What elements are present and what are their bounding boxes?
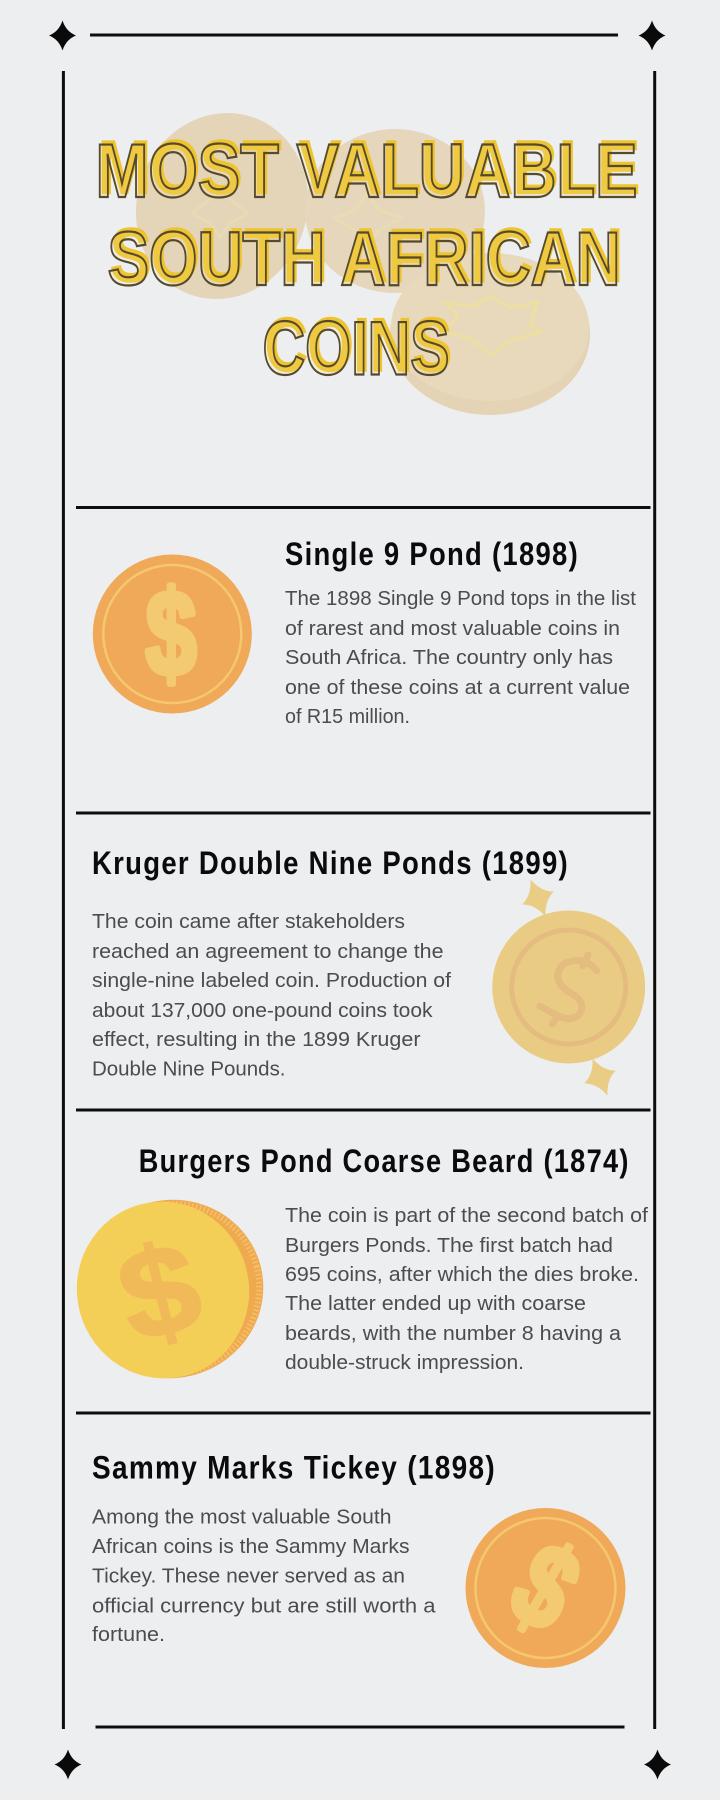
icon: yellow coin with ridged edge: $ <box>105 1215 214 1370</box>
divider 1 <box>76 506 650 509</box>
body text: reached an agreement to change the <box>92 941 444 963</box>
body text: single-nine labeled coin. Production of <box>92 970 451 992</box>
body text <box>92 1506 436 1646</box>
panel: Kruger Double Nine Ponds <box>92 845 645 1102</box>
body text: Tickey. These never served as an <box>92 1566 405 1588</box>
heading: Sammy Marks Tickey (1898) <box>92 1450 496 1486</box>
body text: double-struck impression. <box>285 1352 524 1374</box>
body text: African coins is the Sammy Marks <box>92 1536 409 1558</box>
body text: The coin is part of the second batch of <box>285 1205 648 1227</box>
panel: Single 9 Pond <box>93 536 636 728</box>
body text: of R15 million. <box>285 706 410 728</box>
heading: Burgers Pond Coarse Beard (1874) <box>139 1143 630 1179</box>
title: SOUTH AFRICAN <box>110 214 623 298</box>
heading: Single 9 Pond (1898) <box>285 536 579 572</box>
divider 2 <box>76 812 650 814</box>
icon: orange dollar coin <box>93 554 252 714</box>
icon: pale gold coin with sparkles <box>492 873 645 1102</box>
body text: The 1898 Single 9 Pond tops in the list <box>285 588 636 610</box>
body text: effect, resulting in the 1899 Kruger <box>92 1029 421 1051</box>
title: COINS <box>262 306 450 392</box>
body text: one of these coins at a current value <box>285 677 630 699</box>
divider 4 <box>76 1412 650 1414</box>
icon: orange dollar coin: $ <box>145 566 197 701</box>
title: COINS <box>265 303 452 388</box>
title <box>96 126 640 392</box>
icon: tilted orange dollar coin: $ <box>491 1517 601 1657</box>
body text: fortune. <box>92 1624 165 1646</box>
body text: Among the most valuable South <box>92 1506 392 1528</box>
faded background coins behind title <box>110 89 590 415</box>
body text: Double Nine Pounds. <box>92 1058 286 1080</box>
body text <box>285 588 636 728</box>
heading: Kruger Double Nine Ponds (1899) <box>92 845 569 881</box>
body text: The latter ended up with coarse <box>285 1293 586 1315</box>
icon: yellow coin with ridged edge <box>57 1179 283 1399</box>
divider 3 <box>76 1108 650 1112</box>
body text <box>92 911 451 1080</box>
icon: tilted orange dollar coin <box>466 1508 626 1668</box>
body text: The coin came after stakeholders <box>92 911 405 933</box>
body text: of rarest and most valuable coins in <box>285 618 620 640</box>
body text: beards, with the number 8 having a <box>285 1323 622 1345</box>
body text: South Africa. The country only has <box>285 647 613 669</box>
body text: official currency but are still worth a <box>92 1596 436 1618</box>
title: SOUTH AFRICAN <box>108 217 620 302</box>
panel: Burgers Pond Coarse Beard <box>57 1143 648 1399</box>
body text: 695 coins, after which the dies broke. <box>285 1264 639 1286</box>
body text: about 137,000 one-pound coins took <box>92 1000 434 1022</box>
body text: Burgers Ponds. The first batch had <box>285 1235 613 1257</box>
panel: Sammy Marks Tickey <box>92 1450 626 1668</box>
body text <box>285 1205 648 1374</box>
